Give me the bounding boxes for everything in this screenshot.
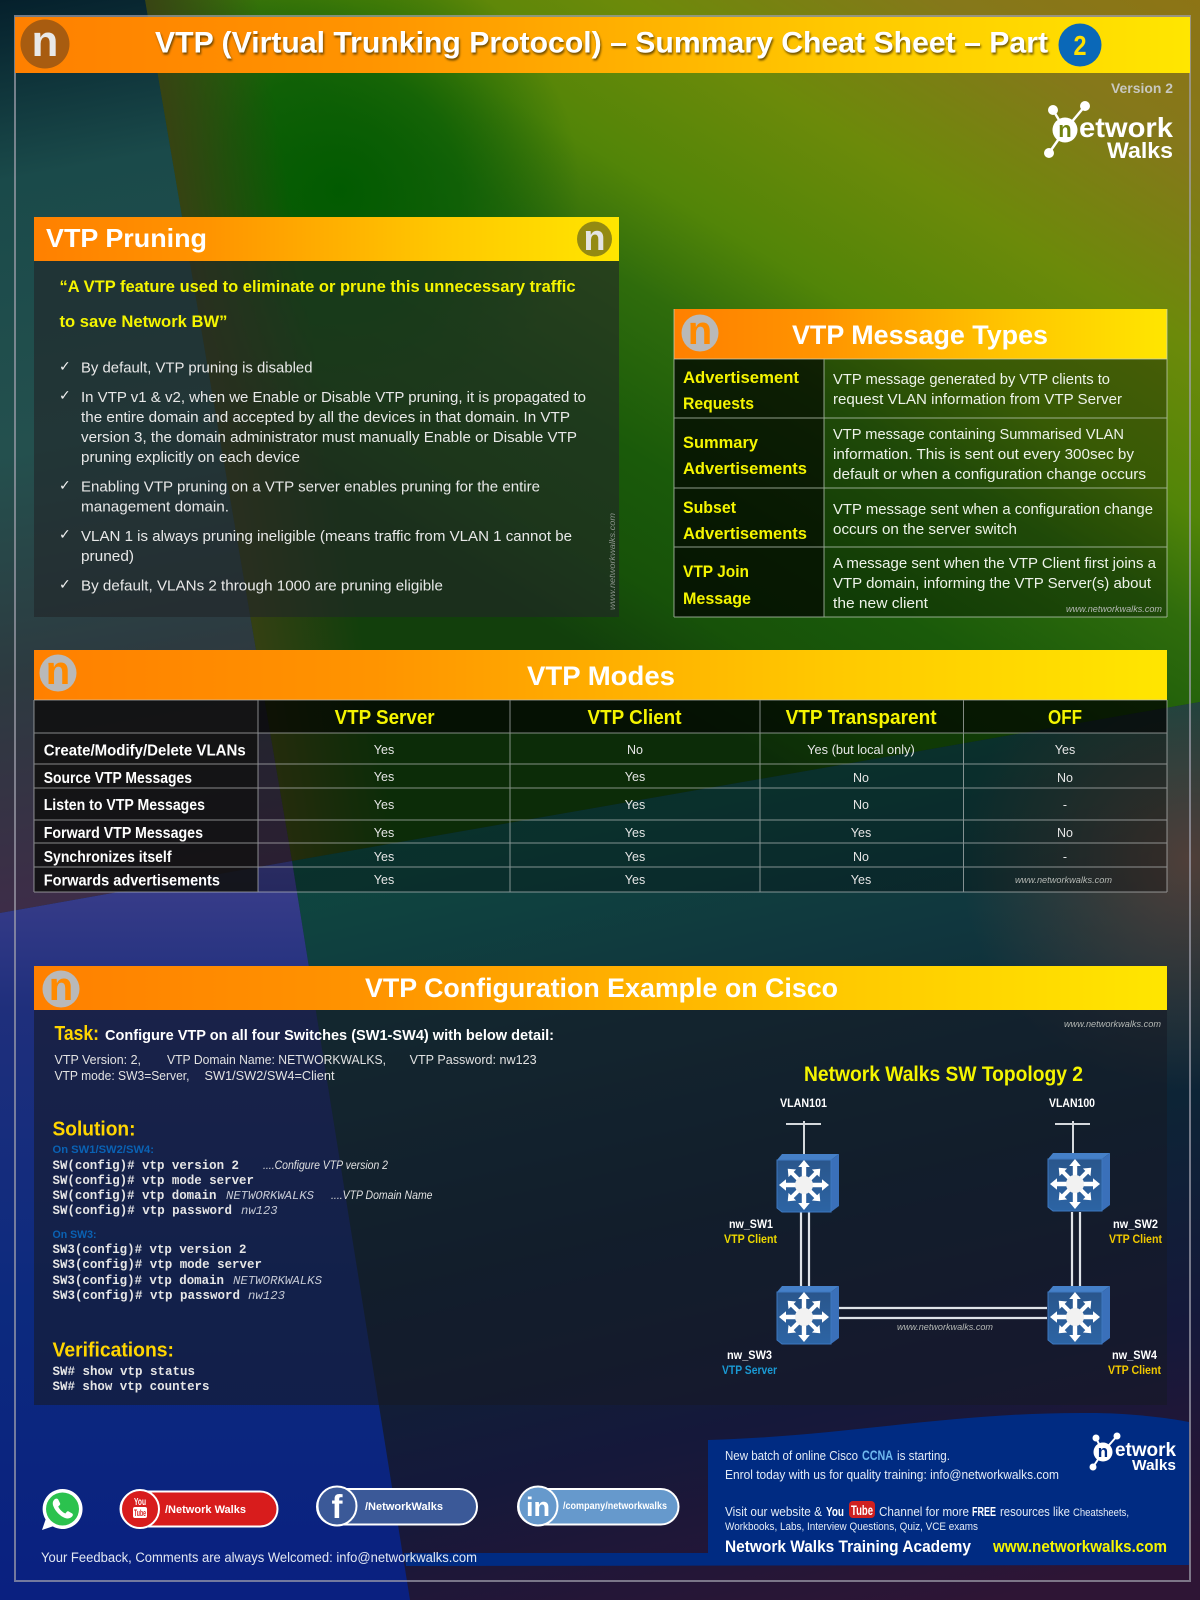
row: Source VTP Messages: [44, 770, 1073, 787]
social: YouTube pill: You: [134, 1497, 146, 1508]
verification commands: [52, 1340, 210, 1394]
solution commands: SW3(config)# vtp password: [52, 1289, 240, 1303]
solution commands: On SW1/SW2/SW4:: [52, 1144, 154, 1156]
switch SW2: [1048, 1153, 1110, 1211]
solution commands: SW(config)# vtp password: [52, 1204, 232, 1218]
row: Create/Modify/Delete VLANs: Yes (but local only): [807, 743, 915, 757]
row: VTP Join Message: A message sent when the VTP Client first joins a: [833, 556, 1157, 572]
panel: VTP Message Types: [674, 309, 1167, 617]
row: VTP Join Message: Message: [683, 589, 751, 608]
row: Subset Advertisements: VTP message sent when a configuration change: [833, 502, 1153, 518]
row: Listen to VTP Messages: [44, 797, 1067, 814]
row: Summary Advertisements: Advertisements: [683, 459, 807, 478]
bullet list: pruning explicitly on each device: [81, 450, 300, 466]
row: Create/Modify/Delete VLANs: Yes: [1055, 743, 1075, 757]
Network Walks logo footer: etwork: [1115, 1440, 1176, 1461]
n badge: n: [46, 649, 70, 693]
row: Summary Advertisements: default or when a configuration change occurs: [833, 467, 1146, 483]
bullet list: ✓: [59, 527, 71, 543]
column headers: VTP Client: [588, 707, 682, 729]
label SW2: VTP Client: [1109, 1234, 1162, 1246]
task description: VTP mode: SW3=Server,: [54, 1068, 190, 1083]
n badge: n: [688, 309, 712, 353]
solution commands: SW3(config)# vtp mode server: [52, 1258, 262, 1272]
vertical watermark: www.networkwalks.com: [607, 513, 617, 610]
definition quote: [60, 277, 576, 331]
row: Advertisement Requests: request VLAN information from VTP Server: [833, 392, 1122, 408]
solution commands: [52, 1119, 432, 1303]
row: Listen to VTP Messages: Yes: [625, 798, 645, 812]
solution commands: NETWORKWALKS: [233, 1274, 322, 1288]
title banner: [15, 17, 1190, 73]
row: Summary Advertisements: VTP message containing Summarised VLAN: [833, 427, 1124, 443]
VLAN labels: [780, 1098, 1095, 1110]
bullet list: ✓: [59, 359, 71, 375]
solution commands: SW3(config)# vtp domain: [52, 1274, 224, 1288]
switch SW3: [777, 1286, 839, 1344]
row: VTP Join Message: VTP Join: [683, 562, 749, 581]
task description: VTP Version: 2,: [54, 1052, 141, 1067]
label SW2: [1109, 1219, 1162, 1246]
column headers: [335, 707, 1082, 729]
task description: VTP Password: nw123: [410, 1052, 537, 1067]
Network Walks logo footer: Walks: [1132, 1457, 1176, 1474]
VLAN labels: VLAN100: [1049, 1098, 1095, 1110]
footer training text: Network Walks Training Academy: [725, 1538, 972, 1556]
row: Advertisement Requests: [683, 368, 1122, 413]
row: Forwards advertisements: Forwards advertisements: [44, 873, 220, 890]
task description: [54, 1023, 554, 1083]
Network Walks logo top right: n: [1058, 117, 1072, 142]
label SW3: nw_SW3: [727, 1350, 772, 1362]
n logo badge: n: [32, 17, 58, 66]
row: Forward VTP Messages: Forward VTP Messages: [44, 825, 203, 842]
row: Source VTP Messages: No: [853, 771, 869, 785]
heading: VTP Pruning: [46, 223, 207, 253]
row: Summary Advertisements: [683, 427, 1146, 483]
footer training text: is starting.: [897, 1449, 950, 1463]
Network Walks logo footer: n: [1098, 1442, 1108, 1461]
row: Forwards advertisements: www.networkwalks.com: [1015, 875, 1112, 886]
row: Forwards advertisements: [44, 873, 1112, 890]
row: Forward VTP Messages: [44, 825, 1073, 842]
bullet list: ✓: [59, 478, 71, 494]
bullet list: the entire domain and accepted by all the devices in that domain. In VTP: [81, 410, 570, 426]
row: Forward VTP Messages: Yes: [625, 826, 645, 840]
bullet list: ✓: [59, 388, 71, 404]
row: Forward VTP Messages: Yes: [851, 826, 871, 840]
social: YouTube pill: Tube: [134, 1508, 146, 1519]
social: LinkedIn pill: /company/networkwalks: [563, 1500, 667, 1512]
n badge: [42, 965, 80, 1009]
footer training text: CCNA: [862, 1448, 893, 1463]
heading: VTP Configuration Example on Cisco: [365, 973, 838, 1003]
solution commands: SW3(config)# vtp version 2: [52, 1243, 246, 1257]
footer training text: FREE: [972, 1505, 996, 1519]
VLAN connectors: [786, 1121, 1090, 1154]
row: Forwards advertisements: Yes: [374, 873, 394, 887]
solution commands: NETWORKWALKS: [226, 1189, 314, 1203]
topology heading: Network Walks SW Topology 2: [804, 1063, 1083, 1086]
footer blue banner: [404, 1413, 1189, 1566]
social: LinkedIn pill: in: [526, 1492, 550, 1522]
solution commands: nw123: [248, 1289, 285, 1303]
footer training text: www.networkwalks.com: [992, 1538, 1167, 1556]
VLAN labels: VLAN101: [780, 1098, 828, 1110]
heading: VTP Message Types: [792, 320, 1048, 350]
bullet list: [59, 359, 586, 595]
label SW3: [722, 1350, 777, 1377]
verification commands: SW# show vtp counters: [52, 1380, 210, 1394]
verification commands: SW# show vtp status: [52, 1365, 195, 1379]
icon: Tube: Tube: [851, 1502, 873, 1518]
footer training text: Enrol today with us for quality training: info@networkwalks.com: [725, 1468, 1059, 1482]
Network Walks logo footer: [1090, 1432, 1176, 1474]
solution commands: nw123: [241, 1204, 278, 1218]
part number badge: [1058, 24, 1102, 66]
solution commands: On SW3:: [52, 1229, 96, 1241]
task description: SW1/SW2/SW4=Client: [204, 1068, 335, 1083]
n badge: [40, 649, 76, 693]
social: Facebook pill: [317, 1486, 477, 1526]
switch SW4: [1048, 1286, 1110, 1344]
task description: VTP Domain Name: NETWORKWALKS,: [167, 1052, 386, 1067]
row: Synchronizes itself: -: [1063, 850, 1067, 864]
solution commands: SW(config)# vtp version 2: [52, 1159, 239, 1173]
label SW1: VTP Client: [724, 1234, 777, 1246]
row: Create/Modify/Delete VLANs: Create/Modify/Delete VLANs: [44, 743, 246, 760]
social: Facebook pill: f: [332, 1488, 344, 1525]
task description: Configure VTP on all four Switches (SW1-SW4) with below detail:: [105, 1027, 554, 1044]
row: Synchronizes itself: [44, 849, 1067, 866]
row: Synchronizes itself: Yes: [625, 850, 645, 864]
label SW4: nw_SW4: [1112, 1350, 1158, 1362]
panel: VTP Configuration Example: [34, 965, 1167, 1405]
row: Source VTP Messages: Yes: [625, 770, 645, 784]
label SW2: nw_SW2: [1113, 1219, 1158, 1231]
social: YouTube pill: [120, 1490, 278, 1528]
Network Walks logo top right: Walks: [1107, 138, 1173, 163]
Network Walks logo top right: etwork: [1079, 112, 1173, 143]
footer training text: Channel for more: [879, 1505, 969, 1519]
footer training text: Workbooks, Labs, Interview Questions, Quiz, VCE exams: [725, 1521, 978, 1533]
n badge: n: [49, 965, 73, 1009]
topology diagram: [722, 1063, 1162, 1377]
bullet list: By default, VTP pruning is disabled: [81, 361, 312, 377]
watermark: www.networkwalks.com: [897, 1322, 993, 1333]
row: Advertisement Requests: VTP message generated by VTP clients to: [833, 372, 1110, 388]
row: Listen to VTP Messages: Listen to VTP Messages: [44, 797, 205, 814]
row: Forwards advertisements: Yes: [625, 873, 645, 887]
bullet list: Enabling VTP pruning on a VTP server enables pruning for the entire: [81, 480, 540, 496]
heading: VTP Modes: [527, 661, 675, 691]
solution commands: SW(config)# vtp domain: [52, 1189, 216, 1203]
row: Listen to VTP Messages: -: [1063, 798, 1067, 812]
row: VTP Join Message: the new client: [833, 596, 928, 612]
row: Advertisement Requests: Advertisement: [683, 368, 799, 387]
social: LinkedIn pill: [518, 1486, 678, 1526]
icon: WhatsApp: [42, 1489, 83, 1530]
n badge: [577, 217, 612, 258]
row: Source VTP Messages: Yes: [374, 770, 394, 784]
row: Source VTP Messages: Source VTP Messages: [44, 770, 192, 787]
footer training text: Visit our website &: [725, 1505, 823, 1519]
solution commands: ....VTP Domain Name: [331, 1190, 432, 1202]
footer training text: resources like: [1000, 1505, 1070, 1519]
title: VTP (Virtual Trunking Protocol) – Summary Cheat Sheet – Part: [155, 26, 1048, 60]
social: YouTube pill: /Network Walks: [165, 1504, 246, 1516]
row: Subset Advertisements: Subset: [683, 498, 736, 517]
solution commands: SW(config)# vtp mode server: [52, 1174, 254, 1188]
row: Listen to VTP Messages: Yes: [374, 798, 394, 812]
definition quote: “A VTP feature used to eliminate or prune this unnecessary traffic: [60, 277, 576, 296]
row: VTP Join Message: VTP domain, informing the VTP Server(s) about: [833, 576, 1151, 592]
row: Summary Advertisements: Summary: [683, 433, 759, 452]
panel: VTP Modes table: [34, 649, 1167, 892]
label SW1: [724, 1219, 777, 1246]
row: Synchronizes itself: Yes: [374, 850, 394, 864]
verification commands: Verifications:: [52, 1340, 174, 1362]
footer training text: New batch of online Cisco: [725, 1449, 858, 1463]
solution commands: Solution:: [52, 1119, 136, 1141]
column headers: VTP Transparent: [786, 707, 937, 729]
row: Subset Advertisements: Advertisements: [683, 524, 807, 543]
Network Walks logo top right: [1044, 101, 1173, 163]
trunk links: [801, 1212, 1080, 1318]
row: Forward VTP Messages: Yes: [374, 826, 394, 840]
label SW4: VTP Client: [1108, 1365, 1161, 1377]
solution commands: ....Configure VTP version 2: [263, 1160, 389, 1172]
label SW1: nw_SW1: [729, 1219, 774, 1231]
n logo badge: [20, 17, 70, 68]
bullet list: In VTP v1 & v2, when we Enable or Disable VTP pruning, it is propagated to: [81, 390, 586, 406]
row: Synchronizes itself: No: [853, 850, 869, 864]
row: Advertisement Requests: Requests: [683, 394, 754, 413]
panel: VTP Pruning: [34, 217, 619, 617]
definition quote: to save Network BW”: [60, 312, 228, 331]
watermark: www.networkwalks.com: [1066, 604, 1162, 615]
part number badge: 2: [1074, 30, 1086, 61]
row: Listen to VTP Messages: No: [853, 798, 869, 812]
row: Forward VTP Messages: No: [1057, 826, 1073, 840]
footer training text: [725, 1448, 1167, 1556]
row: Subset Advertisements: [683, 498, 1153, 543]
version label: Version 2: [1111, 80, 1173, 96]
row: Create/Modify/Delete VLANs: Yes: [374, 743, 394, 757]
column headers: VTP Server: [335, 707, 435, 729]
footer training text: Cheatsheets,: [1073, 1507, 1129, 1519]
watermark: www.networkwalks.com: [1064, 1019, 1161, 1030]
social: Facebook pill: /NetworkWalks: [365, 1501, 443, 1513]
row: Create/Modify/Delete VLANs: No: [627, 743, 643, 757]
icon: Tube: [849, 1501, 875, 1518]
row: VTP Join Message: [683, 556, 1157, 612]
row: Summary Advertisements: information. This is sent out every 300sec by: [833, 447, 1135, 463]
column headers: OFF: [1048, 707, 1082, 729]
bullet list: ✓: [59, 577, 71, 593]
bullet list: VLAN 1 is always pruning ineligible (means traffic from VLAN 1 cannot be: [81, 529, 572, 545]
n badge: [682, 309, 718, 353]
bullet list: By default, VLANs 2 through 1000 are pruning eligible: [81, 579, 443, 595]
row: Create/Modify/Delete VLANs: [44, 743, 1075, 760]
row: Subset Advertisements: occurs on the server switch: [833, 522, 1017, 538]
task description: Task:: [54, 1023, 99, 1045]
label SW4: [1108, 1350, 1161, 1377]
bullet list: version 3, the domain administrator must manually Enable or Disable VTP: [81, 430, 577, 446]
row: Forwards advertisements: Yes: [851, 873, 871, 887]
feedback line: Your Feedback, Comments are always Welcomed: info@networkwalks.com: [41, 1550, 477, 1565]
row: Synchronizes itself: Synchronizes itself: [44, 849, 172, 866]
bullet list: pruned): [81, 549, 134, 565]
n badge: n: [584, 217, 606, 258]
label SW3: VTP Server: [722, 1365, 777, 1377]
row: Source VTP Messages: No: [1057, 771, 1073, 785]
bullet list: management domain.: [81, 500, 229, 516]
footer training text: You: [826, 1505, 844, 1519]
switch SW1: [777, 1154, 839, 1212]
